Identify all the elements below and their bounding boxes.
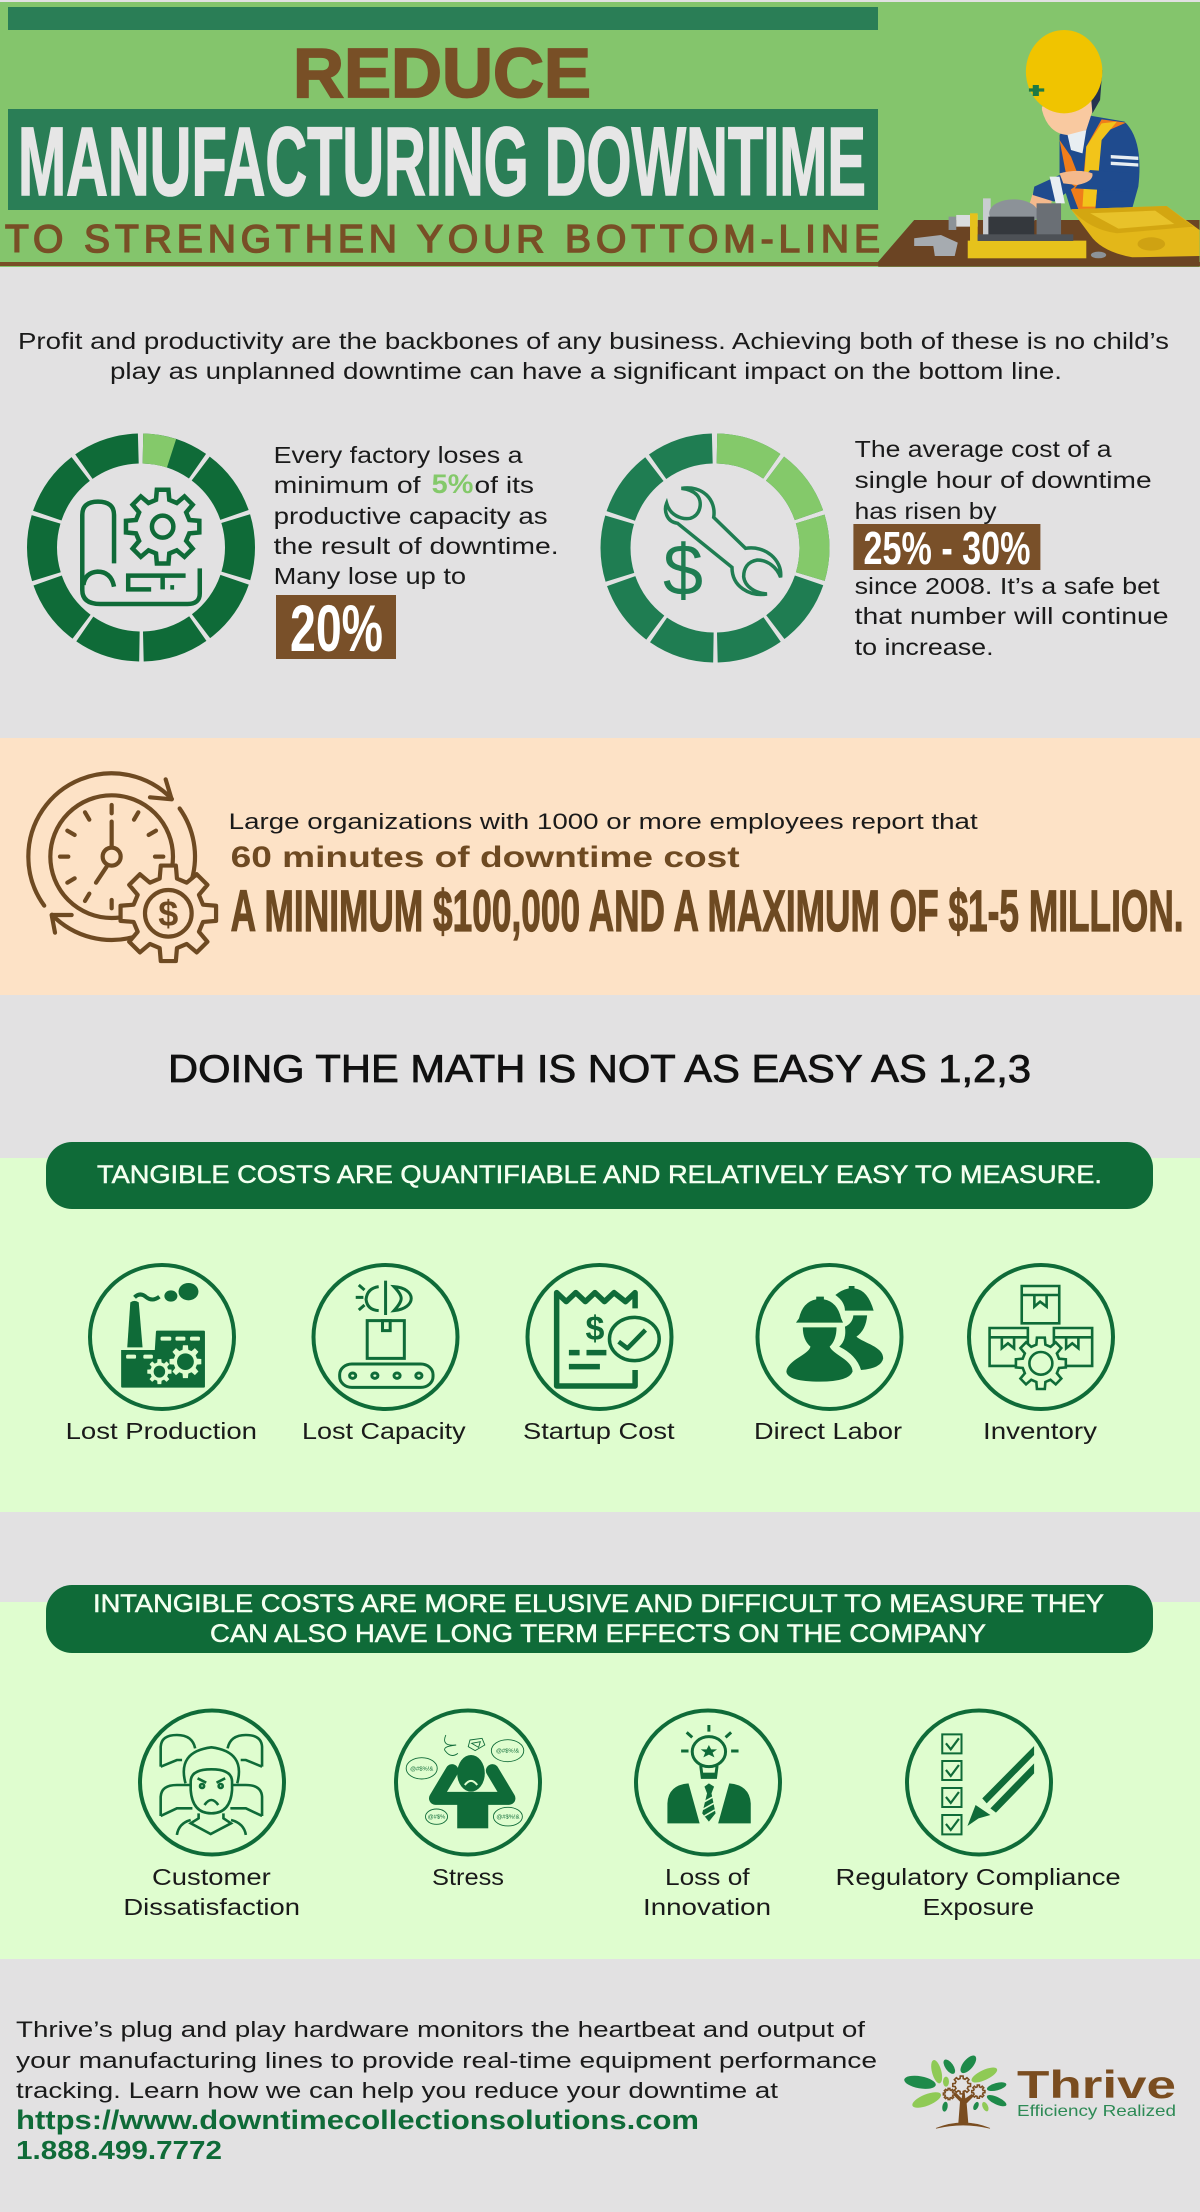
stat text: minimum of	[274, 472, 421, 498]
item: customer dissatisfaction: Dissatisfaction	[123, 1894, 300, 1920]
stat text: that number will continue	[855, 603, 1169, 629]
title: reduce: REDUCE	[293, 34, 591, 112]
intro text block	[18, 328, 1169, 384]
panel: cost per hour stat	[616, 436, 1169, 660]
item: direct labor: Direct Labor	[754, 1418, 902, 1444]
heading: doing the math: DOING THE MATH IS NOT AS EASY AS 1,2,3	[168, 1048, 1031, 1091]
item: loss of innovation: Loss of	[665, 1864, 750, 1890]
intro text block: Profit and productivity are the backbones of any business. Achieving both of these is no child’s	[18, 328, 1169, 354]
subtitle: TO STRENGTHEN YOUR BOTTOM-LINE	[5, 218, 880, 261]
stat text: 5%	[432, 469, 473, 499]
item: lost capacity: Lost Capacity	[302, 1418, 466, 1444]
ring gauge: 5 percent	[42, 448, 240, 646]
item: stress: @#$%!&	[410, 1766, 433, 1772]
item: regulatory compliance exposure: Regulatory Compliance	[836, 1864, 1121, 1890]
pill heading: tangible	[46, 1142, 1153, 1209]
band text: Large organizations with 1000 or more employees report that	[229, 809, 979, 834]
footer text	[16, 2017, 877, 2165]
stat text: to increase.	[855, 634, 994, 660]
footer text: tracking. Learn how we can help you reduce your downtime at	[16, 2078, 779, 2103]
item: stress: @#$%	[428, 1815, 445, 1821]
item: startup cost	[523, 1265, 675, 1444]
item: lost production	[66, 1265, 257, 1444]
item: lost production: Lost Production	[66, 1418, 257, 1444]
item: customer dissatisfaction	[123, 1710, 300, 1920]
item: inventory: Inventory	[983, 1418, 1098, 1444]
item: stress	[396, 1710, 540, 1890]
logo: thrive: Thrive	[1017, 2064, 1176, 2107]
icon: clock with gear and arrows: $	[158, 893, 178, 934]
pill heading: intangible: CAN ALSO HAVE LONG TERM EFFECTS ON THE COMPANY	[210, 1620, 986, 1648]
stat text: single hour of downtime	[855, 467, 1152, 493]
icon: wrench and dollar	[663, 488, 781, 611]
footer text: Thrive’s plug and play hardware monitors the heartbeat and output of	[16, 2017, 866, 2042]
panel: intangible costs	[0, 1585, 1200, 1959]
item: regulatory compliance exposure	[836, 1710, 1121, 1920]
band text: 60 minutes of downtime cost	[231, 841, 740, 874]
item: startup cost: $	[586, 1310, 605, 1348]
intro text block: play as unplanned downtime can have a significant impact on the bottom line.	[110, 358, 1062, 384]
item: loss of innovation: Innovation	[643, 1894, 771, 1920]
item: stress: @#$%!&	[496, 1815, 520, 1821]
callout: 25 to 30 percent: 25% - 30%	[864, 522, 1030, 574]
footer text: your manufacturing lines to provide real-time equipment performance	[16, 2048, 877, 2073]
item: inventory	[969, 1265, 1113, 1444]
footer text: https://www.downtimecollectionsolutions.com	[16, 2105, 699, 2135]
item: direct labor	[754, 1265, 902, 1444]
icon: wrench and dollar: $	[663, 531, 703, 611]
stat text: Many lose up to	[274, 563, 466, 589]
stat text: since 2008. It’s a safe bet	[855, 573, 1160, 599]
stat text: The average cost of a	[855, 436, 1113, 462]
pill heading: tangible: TANGIBLE COSTS ARE QUANTIFIABLE AND RELATIVELY EASY TO MEASURE.	[97, 1161, 1102, 1189]
pill heading: intangible	[46, 1585, 1153, 1653]
stat text: the result of downtime.	[274, 533, 559, 559]
item: customer dissatisfaction: Customer	[152, 1864, 271, 1890]
panel: cost of downtime band	[0, 738, 1200, 995]
pill heading: intangible: INTANGIBLE COSTS ARE MORE ELUSIVE AND DIFFICULT TO MEASURE THEY	[93, 1590, 1104, 1618]
panel: 5 percent stat	[42, 442, 559, 665]
item: stress: Stress	[432, 1864, 504, 1890]
item: regulatory compliance exposure: Exposure	[923, 1894, 1034, 1920]
logo: thrive: Efficiency Realized	[1017, 2103, 1176, 2120]
stat text: has risen by	[855, 498, 997, 524]
panel: tangible costs	[0, 1142, 1200, 1512]
item: loss of innovation	[636, 1710, 780, 1920]
band text	[229, 809, 1184, 944]
ring gauge: 30 percent	[616, 448, 814, 648]
item: stress: @#$%!&	[496, 1749, 519, 1755]
illustration: worker at machine	[878, 30, 1200, 267]
logo: thrive	[903, 2053, 1176, 2128]
callout: 20 percent: 20%	[290, 591, 383, 665]
footer text: 1.888.499.7772	[16, 2135, 222, 2165]
stat text: productive capacity as	[274, 503, 548, 529]
stat text	[274, 442, 559, 589]
item: startup cost: Startup Cost	[523, 1418, 675, 1444]
icon: clock with gear and arrows	[28, 773, 216, 961]
panel: header banner	[0, 2, 1200, 267]
icon: blueprint and gear	[82, 490, 200, 604]
stat text: Every factory loses a	[274, 442, 524, 468]
stat text	[855, 436, 1169, 660]
stat text: of its	[474, 472, 534, 498]
item: lost capacity	[302, 1265, 466, 1444]
